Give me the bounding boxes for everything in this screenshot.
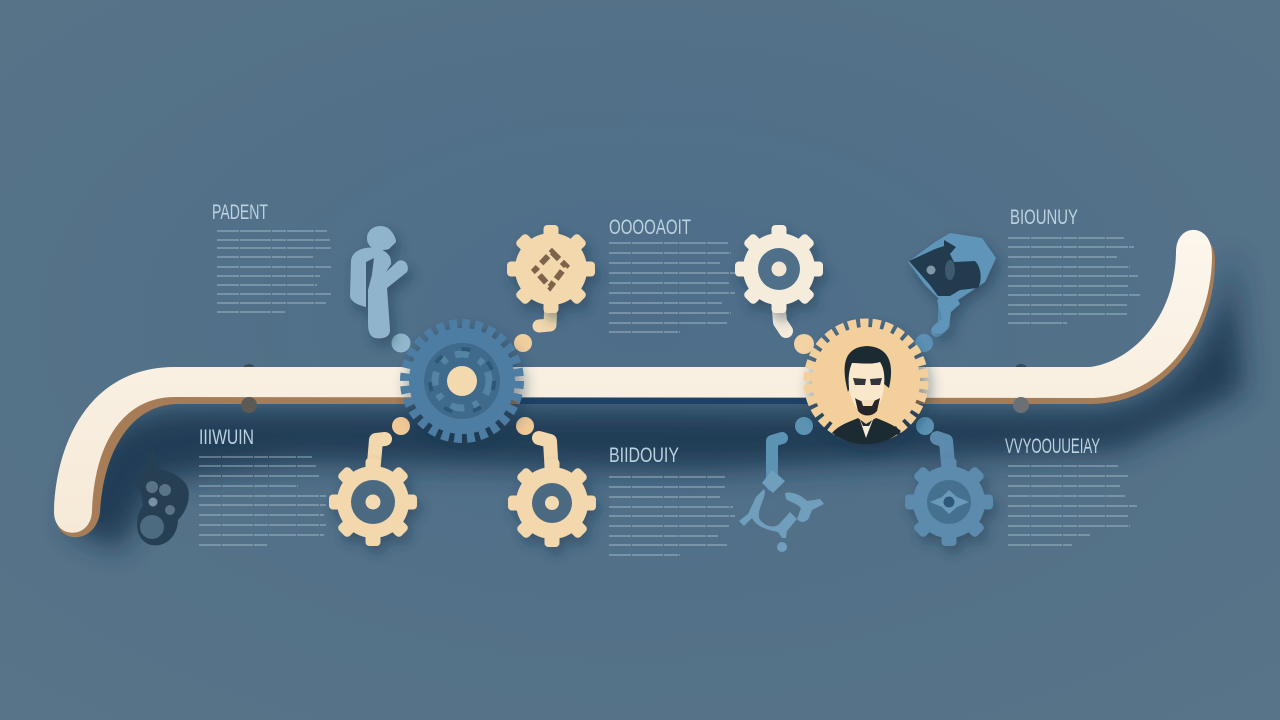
icon: dark emblem — [908, 233, 996, 334]
icon: blue gear — [905, 458, 993, 546]
gear stems — [373, 292, 949, 485]
main gear: blue — [407, 326, 517, 436]
main gear: portrait — [810, 325, 922, 444]
heading: lower right: VVYOOUUEIAY — [1005, 435, 1100, 458]
gear hub — [447, 366, 477, 396]
heading: lower centre: BIIDOUIY — [609, 444, 679, 467]
portrait — [832, 346, 901, 444]
text block: lower right — [1008, 466, 1137, 545]
icon: dark skull — [133, 443, 189, 545]
text block: lower left — [199, 457, 326, 545]
heading: upper centre: OOOOAOIT — [609, 216, 691, 239]
icon: centre tan gear — [508, 459, 596, 547]
text block: upper centre — [609, 243, 735, 332]
timeline bar — [54, 230, 1244, 550]
icon: tan gear — [507, 225, 595, 313]
icon: left tan gear — [329, 458, 417, 546]
text block: lower centre — [609, 477, 735, 555]
heading: lower left: IIIWUIN — [199, 426, 254, 449]
icon: broken blue gear — [739, 470, 824, 552]
connector dots — [392, 334, 934, 435]
heading: upper right: BIOUNUY — [1010, 206, 1078, 229]
icon: cream gear — [735, 225, 823, 313]
heading: upper left: PADENT — [212, 201, 268, 224]
text block: upper left — [217, 231, 331, 312]
icon: person — [350, 226, 408, 338]
text block: upper right — [1008, 238, 1140, 323]
